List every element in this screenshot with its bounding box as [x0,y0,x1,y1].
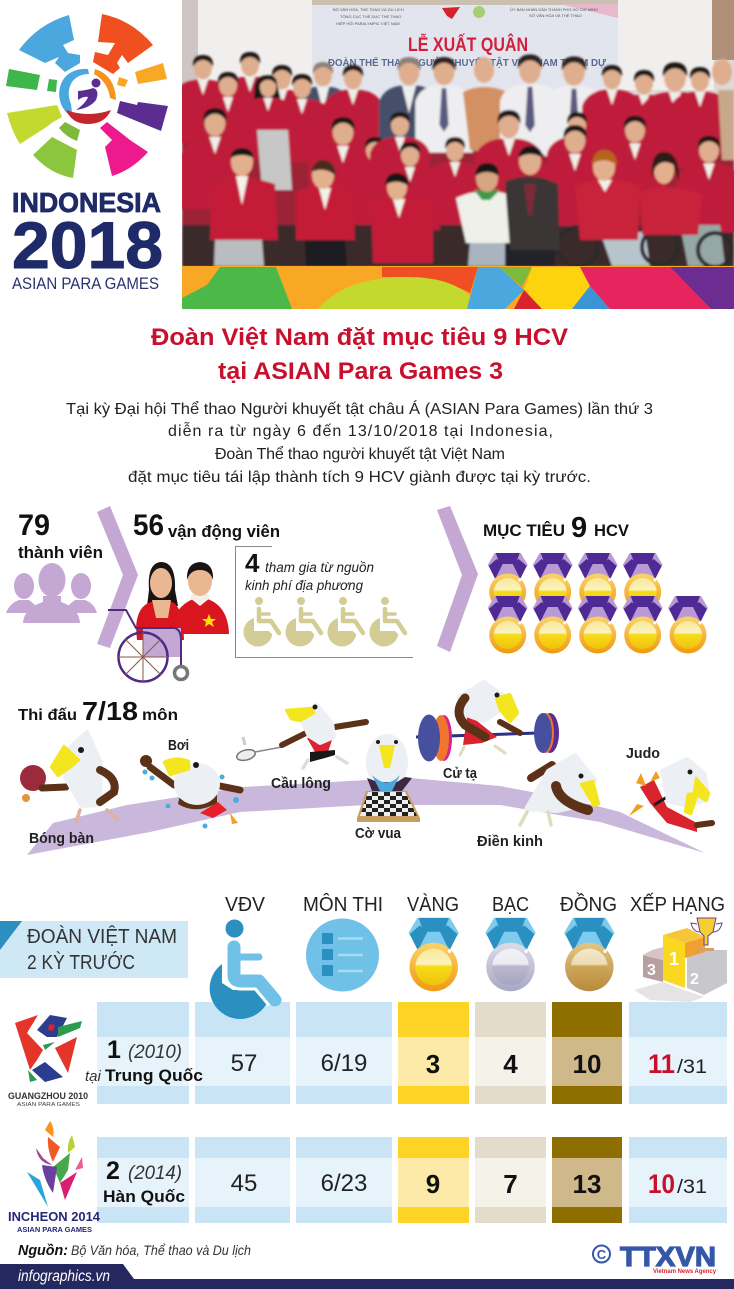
arrow: chevron one [97,506,138,648]
row 1 values: /31 [677,1057,707,1078]
section banner: delegation in previous two games [0,921,188,978]
logo: Incheon 2014 [8,1121,100,1234]
goal: 9 gold medals [483,512,708,654]
callout: 4 locally funded athletes: tham gia từ nguồn [265,560,374,575]
intro paragraph: diễn ra từ ngày 6 đến 13/10/2018 tại Indonesia, [168,421,553,440]
event backdrop banner: HIỆP HỘI PARALYMPIC VIỆT NAM [336,21,400,26]
column headers: XẾP HẠNG [630,893,725,916]
medals row one [488,553,663,610]
icon: wheelchair 1 [244,597,285,648]
label: Cử tạ: Cử tạ [443,766,478,782]
footer bar [0,1264,734,1289]
icon: podium and trophy: 3 [647,962,656,979]
column headers: VĐV [225,894,266,916]
icon: wheelchair 4 [370,597,411,648]
row 2 values [231,1169,707,1199]
row 1 games label: (2010) [128,1042,182,1063]
row 2 games label: 2 [106,1157,120,1185]
row 2 values: 45 [231,1170,257,1197]
arrow: chevron two [437,506,478,652]
agency credit: TTXVN: C [597,1247,607,1262]
section banner: delegation in previous two games: 2 KỲ TRƯỚC [27,951,135,974]
stat: 79 members: thành viên [18,543,103,562]
logo: Guangzhou 2010: GUANGZHOU 2010 [8,1091,88,1101]
mascot: badminton [236,704,366,768]
event backdrop banner: TỔNG CỤC THỂ DỤC THỂ THAO [340,14,401,19]
row 2 games label: Hàn Quốc [103,1187,185,1206]
column headers: VÀNG [407,893,459,916]
title: Đoàn Việt Nam đặt mục tiêu 9 HCV [151,324,568,351]
mascot: table tennis [20,732,118,822]
label: Cầu lông: Cầu lông [271,776,331,792]
callout: 4 locally funded athletes [236,546,413,658]
logo: Indonesia 2018 Asian Para Games [6,14,168,293]
event backdrop banner: LỄ XUẤT QUÂN [408,34,528,56]
stat: 56 athletes: 56 [133,509,164,542]
row 2 values: /31 [677,1177,707,1198]
row 2 values: 7 [503,1169,518,1199]
row 2 games label [103,1157,185,1206]
row 2 games label: (2014) [128,1163,182,1184]
intro paragraph: đặt mục tiêu tái lập thành tích 9 HCV giành được tại kỳ trước. [128,469,591,486]
event backdrop banner: ĐOÀN THỂ THAO NGƯỜI KHUYẾT TẬT VIỆT NAM THAM DỰ [328,56,606,69]
heading: competing in 7 of 18 sports: 7/18 [82,696,138,726]
label: Bơi: Bơi [168,738,189,754]
wheelchair frame [108,610,188,682]
stat: 79 members: 79 [18,509,50,542]
row 1 games label: tại [85,1068,102,1085]
logo wheel emblem [6,14,168,178]
column headers [225,892,725,916]
logo: Guangzhou 2010 [8,1015,88,1108]
mascot: judo [629,759,712,832]
agency credit: TTXVN: TTXVN [620,1241,716,1272]
front row seated athletes [210,146,732,267]
logo: Incheon 2014: INCHEON 2014 [8,1210,100,1224]
row 1 values: 4 [503,1049,518,1079]
icon: wheelchair 2 [286,597,327,648]
callout: 4 locally funded athletes: 4 [245,548,260,578]
row 2 values: 10 [648,1169,675,1199]
label: Judo: Judo [626,746,660,762]
column headers: MÔN THI [303,893,383,916]
logo: Guangzhou 2010: ASIAN PARA GAMES [17,1102,80,1108]
heading: competing in 7 of 18 sports: Thi đấu [18,707,77,724]
agency credit: TTXVN: Vietnam News Agency [653,1269,717,1275]
logo text Asian Para Games: ASIAN PARA GAMES [12,275,159,293]
icon: gold medal [408,918,459,991]
mascot: athletics [520,755,599,825]
event backdrop banner: BỘ VĂN HÓA, THỂ THAO VÀ DU LỊCH [333,7,404,12]
icon: sports list [306,918,379,992]
mascot: weightlifting [416,682,559,762]
row 2 values: 6/23 [321,1170,367,1197]
row 1 games label: Trung Quốc [105,1066,203,1085]
row 1 values: 3 [426,1049,440,1079]
source note [18,1242,251,1259]
logo: Incheon 2014: ASIAN PARA GAMES [17,1227,92,1234]
icon: silver medal [485,918,536,991]
mascot: swimming [140,755,240,828]
icon: three member silhouettes [6,563,97,623]
logo text INDONESIA: INDONESIA [12,187,161,218]
icon: bronze medal [564,918,614,991]
title: tại ASIAN Para Games 3 [218,358,503,385]
icon: man athlete [172,562,229,634]
row 1 games label: 1 [107,1036,121,1064]
column headers: BẠC [492,894,529,916]
intro paragraph: Đoàn Thể thao người khuyết tật Việt Nam [215,445,505,463]
brush stroke path under mascots [27,778,705,855]
stat: 79 members [6,509,103,623]
row 1 values: 57 [231,1050,257,1077]
agency credit: TTXVN [593,1241,717,1275]
label: Bóng bàn: Bóng bàn [29,831,94,847]
stat: 56 athletes [108,509,280,682]
heading: competing in 7 of 18 sports [18,696,178,726]
row 2 values: 13 [573,1169,601,1199]
icon: podium and trophy: 1 [669,949,679,969]
event backdrop banner: ỦY BAN NHÂN DÂN THÀNH PHỐ HỒ CHÍ MINH [510,7,598,12]
decorative colour strip under photo [182,266,734,309]
medals row two [488,596,708,654]
row 1 values [231,1049,707,1079]
label: Điền kinh: Điền kinh [477,834,543,850]
row 2 values: 9 [426,1169,440,1199]
mascot: chess [357,734,420,822]
label: Cờ vua: Cờ vua [355,826,402,842]
logo text 2018: 2018 [12,208,163,282]
event backdrop banner [312,0,618,100]
intro paragraph: Tại kỳ Đại hội Thể thao Người khuyết tật châu Á (ASIAN Para Games) lần thứ 3 [66,399,653,418]
icon: wheelchair 3 [328,597,369,648]
goal: 9 gold medals: MỤC TIÊU [483,521,565,540]
row 1 values: 6/19 [321,1050,367,1077]
stat: 56 athletes: vận động viên [168,522,280,541]
row 1 games label [85,1036,203,1085]
icon: podium and trophy: 2 [690,971,699,988]
title [151,324,568,385]
table cells background [97,1002,727,1223]
row 1 values: 11 [648,1049,675,1079]
footer bar: infographics.vn [18,1268,110,1285]
source note: Nguồn: [18,1242,68,1259]
source note: Bộ Văn hóa, Thể thao và Du lịch [71,1242,251,1258]
photo: Vietnamese delegation at send-off ceremony [173,0,734,267]
icon: podium and trophy [634,918,727,1002]
goal: 9 gold medals: HCV [594,521,630,540]
event backdrop banner: SỞ VĂN HÓA VÀ THỂ THAO [529,13,582,18]
icon: woman athlete in wheelchair [108,562,188,682]
section banner: delegation in previous two games: ĐOÀN VIỆT NAM [27,925,177,948]
goal: 9 gold medals: 9 [571,512,587,544]
delegation members [173,52,734,267]
intro paragraph [66,399,653,486]
icon: blue wheelchair [210,920,275,1019]
callout: 4 locally funded athletes: kinh phí địa phương [245,578,363,593]
column headers: ĐỒNG [560,892,617,916]
heading: competing in 7 of 18 sports: môn [142,707,178,724]
row 1 values: 10 [573,1049,601,1079]
